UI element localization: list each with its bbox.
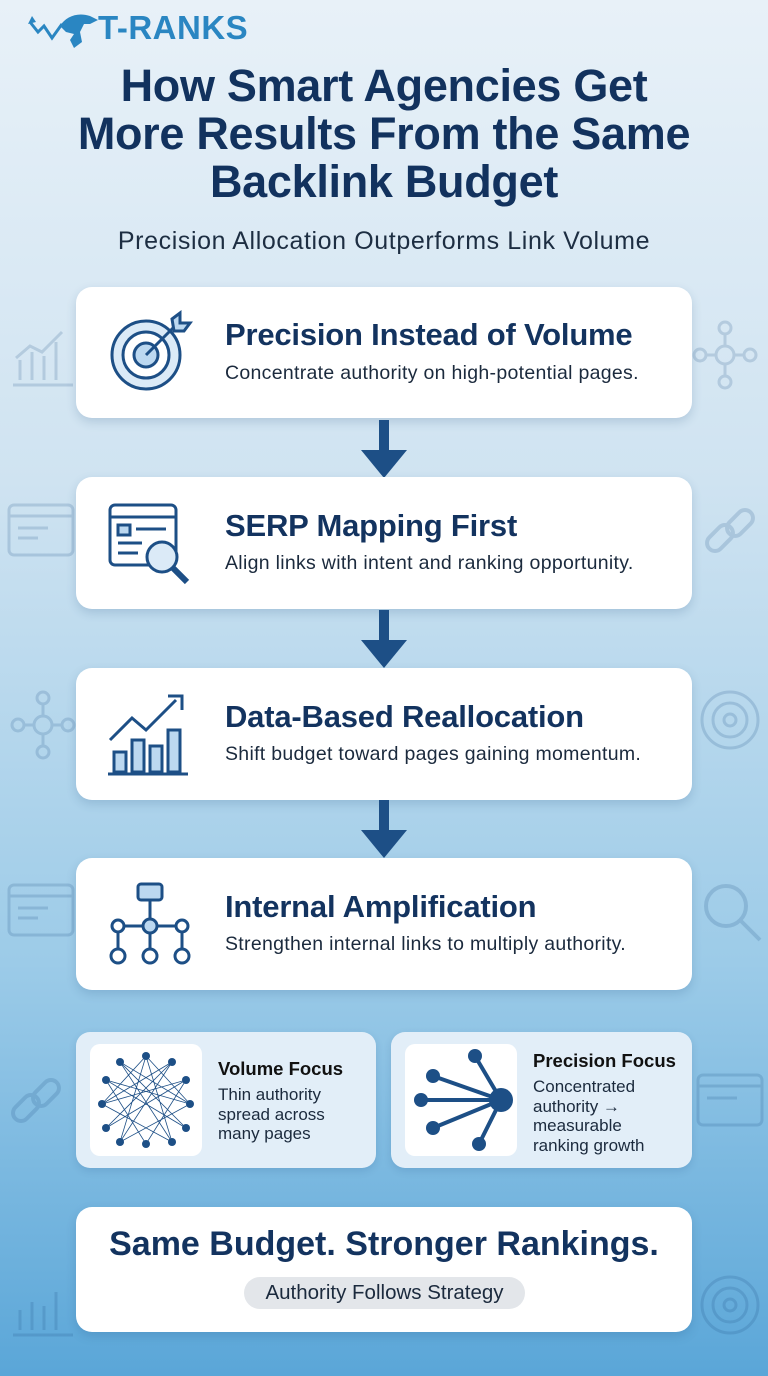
icon: hierarchy — [110, 882, 190, 964]
card 4: internal: Internal Amplification — [225, 889, 536, 924]
icon: growth chart — [108, 694, 188, 776]
arrow 3 — [361, 800, 407, 858]
conclusion heading: Same Budget. Stronger Rankings. — [109, 1225, 659, 1263]
card 2: SERP: SERP Mapping First — [225, 508, 517, 543]
title: How Smart Agencies Get — [121, 60, 647, 111]
panel: precision focus: measurable — [533, 1116, 622, 1135]
icon: dense network — [90, 1044, 202, 1156]
arrow 2 — [361, 610, 407, 668]
title: Backlink Budget — [210, 156, 558, 207]
card 1: precision: Precision Instead of Volume — [225, 317, 632, 352]
card 2: SERP: Align links with intent and ranking opportunity. — [225, 552, 634, 574]
card 1: precision — [76, 287, 692, 418]
card 4: internal — [76, 858, 692, 990]
card 2: SERP — [76, 477, 692, 609]
panel: volume focus: many pages — [218, 1124, 311, 1143]
card 3: data: Shift budget toward pages gaining momentum. — [225, 743, 641, 765]
panel: precision focus: authority → — [533, 1096, 620, 1116]
panel: volume focus: spread across — [218, 1104, 325, 1124]
conclusion card — [76, 1207, 692, 1332]
panel: precision focus: ranking growth — [533, 1136, 645, 1154]
logo — [28, 9, 248, 48]
icon: target — [110, 310, 193, 390]
icon: browser search — [108, 504, 190, 584]
card 3: data — [76, 668, 692, 800]
panel: precision focus: Precision Focus — [533, 1050, 676, 1071]
icon: hub network — [405, 1044, 517, 1156]
pill: tagline: Authority Follows Strategy — [265, 1281, 504, 1304]
title — [78, 60, 690, 207]
subtitle: Precision Allocation Outperforms Link Volume — [118, 227, 650, 255]
panel: precision focus: Concentrated — [533, 1077, 635, 1096]
card 3: data: Data-Based Reallocation — [225, 699, 584, 734]
arrow 1 — [361, 420, 407, 477]
panel: volume focus — [76, 1032, 376, 1168]
panel: volume focus: Thin authority — [218, 1085, 321, 1104]
panel: precision focus — [391, 1032, 692, 1168]
pill: tagline — [244, 1277, 525, 1309]
background decorative icons — [8, 320, 764, 1336]
card 1: precision: Concentrate authority on high-potential pages. — [225, 362, 639, 384]
title: More Results From the Same — [78, 108, 690, 159]
card 4: internal: Strengthen internal links to multiply authority. — [225, 933, 626, 955]
panel: volume focus: Volume Focus — [218, 1058, 343, 1079]
logo: T-RANKS — [98, 9, 248, 46]
